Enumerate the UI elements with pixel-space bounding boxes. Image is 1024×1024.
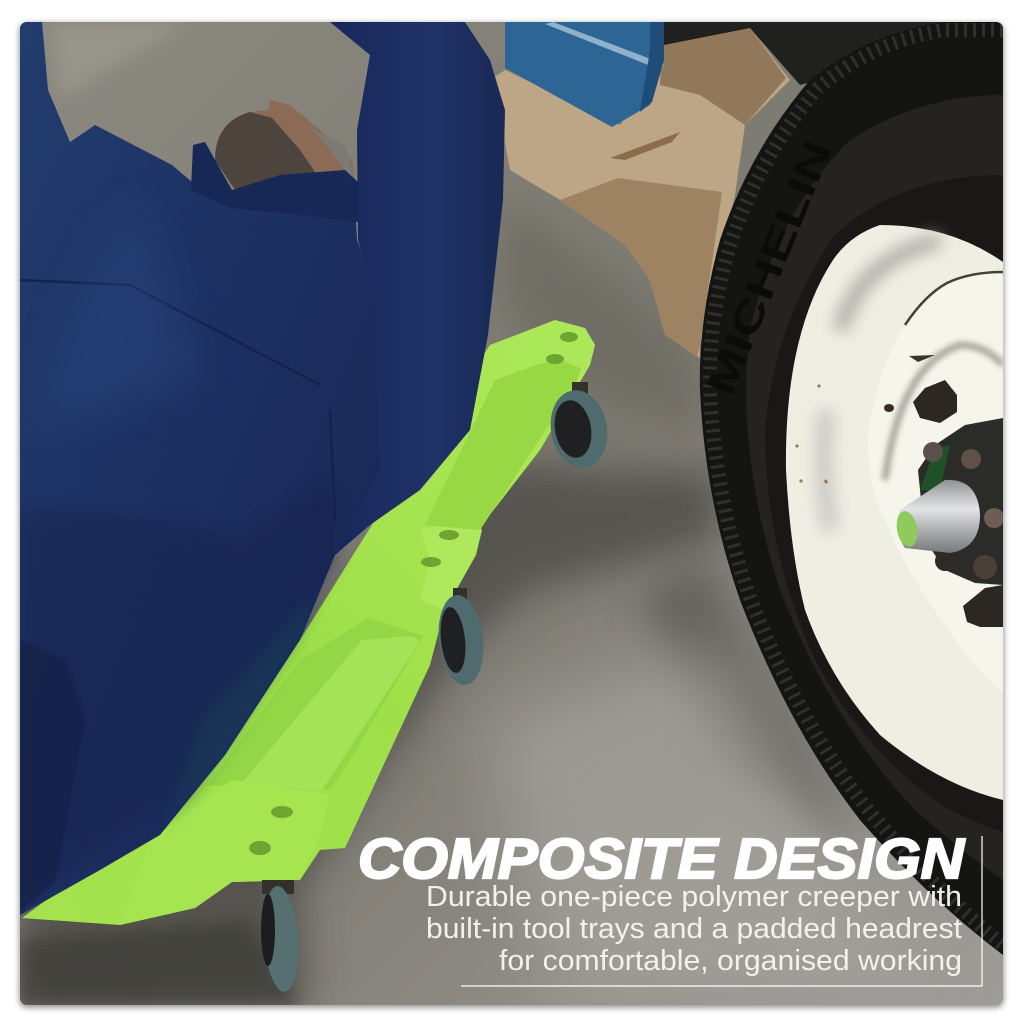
wheel stud nuts bbox=[913, 380, 957, 423]
description text: Durable one-piece polymer creeper with bbox=[426, 881, 962, 913]
heading: COMPOSITE DESIGN bbox=[358, 827, 966, 891]
creeper head end ridge bbox=[420, 520, 482, 610]
upper castor bbox=[550, 382, 608, 468]
silver hub cap bbox=[897, 480, 980, 553]
tyre tread shoulder bbox=[710, 30, 1003, 945]
corner rule bbox=[461, 836, 982, 986]
teal reflection on suit bbox=[174, 620, 313, 819]
wheel rim bbox=[786, 225, 1003, 800]
mechanic raised arm bbox=[330, 22, 505, 555]
collar bbox=[191, 142, 358, 222]
middle castor bbox=[438, 588, 484, 685]
blue machine block bbox=[505, 22, 960, 127]
castor wheels bbox=[260, 382, 613, 993]
mechanic head bbox=[191, 100, 358, 222]
mechanic body bbox=[20, 22, 505, 915]
tyre bbox=[690, 20, 1010, 970]
creeper holes bbox=[560, 332, 578, 342]
inner wheel disc bbox=[868, 272, 1003, 692]
creeper tool tray bbox=[208, 618, 424, 790]
lower castor bbox=[261, 880, 298, 992]
body shadow folds bbox=[22, 512, 344, 866]
green creeper bbox=[22, 320, 595, 925]
creeper upper trough bbox=[425, 362, 581, 530]
tyre sidewall brand text: MICHELIN bbox=[699, 135, 840, 401]
wheel hub and bolts bbox=[894, 380, 1004, 627]
description text: for comfortable, organised working bbox=[499, 945, 962, 977]
description text bbox=[426, 881, 962, 977]
brown paper bbox=[493, 28, 790, 358]
description text: built-in tool trays and a padded headrest bbox=[426, 913, 962, 945]
creeper foot end ridge bbox=[120, 780, 300, 925]
